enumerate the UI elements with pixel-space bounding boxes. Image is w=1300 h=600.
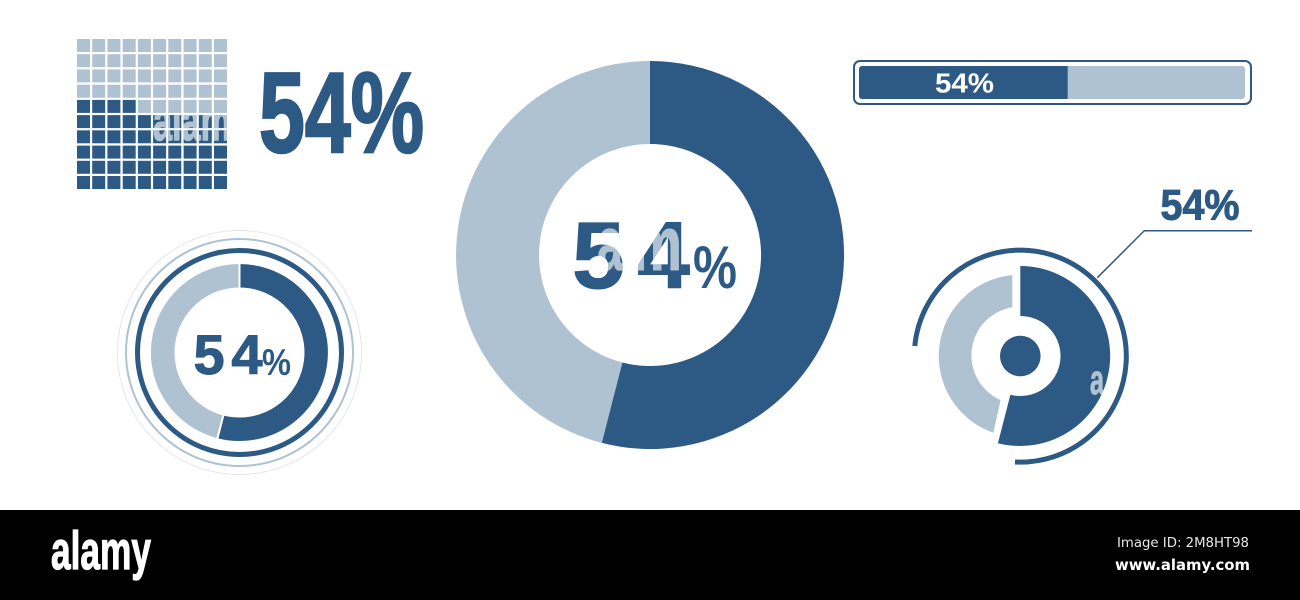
waffle chart: 54 of 100 squares [77, 39, 227, 189]
ringed donut label: 54 [194, 323, 262, 386]
central donut chart [456, 61, 844, 449]
stock watermark remnants: a [597, 202, 623, 287]
progress bar label: 54% [935, 68, 994, 98]
footer bar [0, 510, 1300, 600]
ringed donut label: % [262, 342, 291, 383]
central donut label: 54 [572, 203, 690, 309]
central donut label: % [693, 234, 737, 301]
stock watermark remnants: alam [153, 89, 231, 152]
ringed donut chart [118, 230, 362, 474]
progress bar [854, 61, 1251, 104]
stock watermark remnants: a [1090, 356, 1104, 403]
waffle percentage label: 54% [259, 50, 424, 177]
footer logo: alamy [51, 521, 151, 581]
website: www.alamy.com [1115, 556, 1250, 574]
image id: Image ID: 2M8HT98 [1117, 535, 1249, 551]
stock watermark remnants [153, 89, 1104, 403]
offset segmented donut chart [915, 250, 1126, 462]
callout label: 54% [1160, 182, 1240, 230]
stock watermark remnants: m [632, 202, 682, 287]
leader line [1097, 231, 1252, 278]
